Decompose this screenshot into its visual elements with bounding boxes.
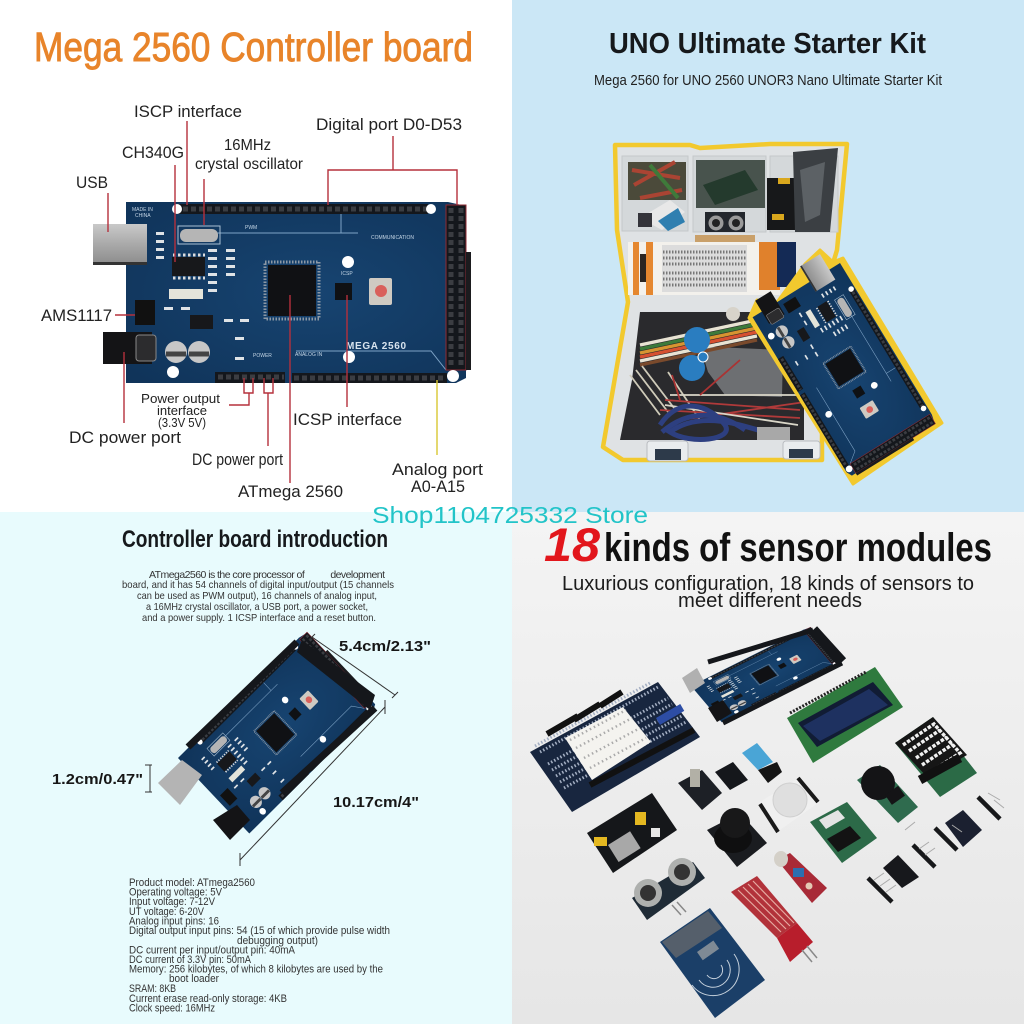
rotary encoder (678, 769, 722, 810)
labelled board photo: ICSP (341, 271, 353, 277)
box clips (647, 441, 688, 461)
subheading (562, 573, 974, 612)
subtitle: Mega 2560 for UNO 2560 UNOR3 Nano Ultimate Starter Kit (594, 73, 942, 89)
breadboard card (628, 242, 780, 295)
angled board photo (158, 629, 379, 840)
potentiometer (726, 307, 740, 321)
modules photo (530, 626, 1004, 1018)
introduction paragraph: and a power supply. 1 ICSP interface and a reset button. (142, 612, 376, 624)
Mega board with yellow outline (749, 250, 942, 484)
callout labels: ISCP interface (134, 102, 242, 121)
callout labels: AMS1117 (41, 306, 112, 325)
kit box photo (603, 144, 942, 484)
callout labels: interface (157, 404, 207, 418)
subheading: Luxurious configuration, 18 kinds of sensors to (562, 573, 974, 595)
panel: Controller board introduction (0, 512, 512, 1024)
lower compartment wires (620, 312, 804, 440)
dimension labels: 1.2cm/0.47" (52, 771, 143, 788)
specifications text: Analog input pins: 16 (129, 916, 219, 928)
LED matrix (895, 717, 977, 797)
specifications text (129, 877, 390, 1014)
specifications text: UT voltage: 6-20V (129, 906, 205, 918)
introduction paragraph: can be used as PWM output), 16 channels of analog input, (137, 590, 377, 602)
specifications text: Current erase read-only storage: 4KB (129, 993, 287, 1005)
panel: 18 kinds of sensor modules (512, 512, 1024, 1024)
labelled board photo: POWER (253, 353, 272, 359)
specifications text: Digital output input pins: 54 (15 of which provide pulse width (129, 925, 390, 937)
microphone sensor (774, 851, 827, 903)
heading: 18 kinds of sensor modules (544, 518, 992, 571)
RFID module (660, 908, 765, 1018)
callout labels: DC power port (69, 428, 181, 447)
pin headers (868, 793, 1004, 902)
specifications text: boot loader (169, 973, 219, 985)
labelled board photo: MEGA 2560 (346, 341, 406, 352)
joystick (707, 808, 767, 867)
DHT11 sensor (742, 743, 782, 783)
small sensor boards (883, 810, 982, 888)
specifications text: Input voltage: 7-12V (129, 896, 216, 908)
callout labels: Digital port D0-D53 (316, 115, 462, 134)
heading: UNO Ultimate Starter Kit: UNO Ultimate Starter Kit (609, 28, 926, 60)
specifications text: DC current of 3.3V pin: 50mA (129, 954, 252, 966)
power module (767, 178, 795, 230)
heading: 18 kinds of sensor modules: 18 (544, 518, 601, 571)
heading: Controller board introduction: Controller board introduction (122, 526, 388, 553)
Mega board (682, 626, 843, 723)
callout labels: A0-A15 (411, 477, 465, 496)
analog port callout line (436, 380, 438, 455)
callout labels: 16MHz (224, 137, 271, 154)
callout labels: Power output (141, 392, 221, 406)
labelled board photo: PWM (245, 225, 257, 231)
callout lines (108, 121, 457, 483)
specifications text: Memory: 256 kilobytes, of which 8 kilobytes are used by the (129, 964, 383, 976)
callout labels: crystal oscillator (195, 156, 304, 173)
labelled board photo: CHINA (135, 213, 151, 219)
introduction paragraph (122, 569, 394, 624)
rainbow ribbon cable (640, 320, 757, 365)
labelled board photo: COMMUNICATION (371, 235, 414, 241)
bag of modules (696, 160, 765, 208)
antistatic bag (793, 148, 838, 232)
panel: controller board diagram (0, 0, 512, 512)
storage box with yellow outline (603, 144, 847, 460)
subheading: meet different needs (678, 590, 862, 612)
callout labels: Analog port (392, 460, 483, 479)
specifications text: Clock speed: 16MHz (129, 1002, 215, 1014)
LCD display (787, 667, 903, 763)
dimension labels: 10.17cm/4" (333, 794, 419, 811)
labelled board photo: ANALOG IN (295, 352, 323, 358)
DS1302 clock (857, 765, 918, 823)
specifications text: Operating voltage: 5V (129, 886, 223, 898)
callout labels (41, 102, 483, 501)
callout labels: DC power port (192, 450, 283, 469)
specifications text: SRAM: 8KB (129, 983, 176, 995)
callout labels: USB (76, 173, 108, 192)
introduction paragraph: a 16MHz crystal oscillator, a USB port, a power socket, (146, 601, 368, 613)
PIR sensor (760, 778, 818, 832)
callout labels: (3.3V 5V) (158, 416, 206, 430)
water sensor (731, 876, 817, 962)
introduction paragraph: ATmega2560 is the core processor of development (149, 569, 385, 581)
watermark: shop name: Shop1104725332 Store (372, 502, 648, 528)
title: Mega 2560 Controller board: Mega 2560 Controller board (34, 24, 473, 70)
prototype shield (530, 682, 700, 812)
labelled board photo: MADE IN (132, 207, 153, 213)
loose components (628, 162, 686, 200)
ultrasonic sensor (632, 858, 705, 920)
power module (587, 793, 677, 873)
labelled board photo (93, 202, 471, 383)
dimension lines (145, 634, 398, 866)
jumper wires (630, 360, 805, 425)
dimension labels: 5.4cm/2.13" (339, 638, 431, 655)
ultrasonic sensor (705, 212, 745, 232)
specifications text: Product model: ATmega2560 (129, 877, 255, 889)
stepper driver (810, 802, 877, 863)
dimension labels (52, 638, 431, 811)
callout labels: ATmega 2560 (238, 482, 343, 501)
callout labels: ICSP interface (293, 410, 402, 429)
specifications text: debugging output) (237, 935, 318, 947)
USB cable (660, 406, 765, 439)
panel: UNO Ultimate Starter Kit (512, 0, 1024, 512)
callout labels: CH340G (122, 143, 184, 162)
small sensor (715, 762, 748, 790)
introduction paragraph: board, and it has 54 channels of digital input/output (15 channels (122, 579, 394, 591)
specifications text: DC current per input/output pin: 40mA (129, 944, 296, 956)
blue fan (684, 327, 710, 353)
